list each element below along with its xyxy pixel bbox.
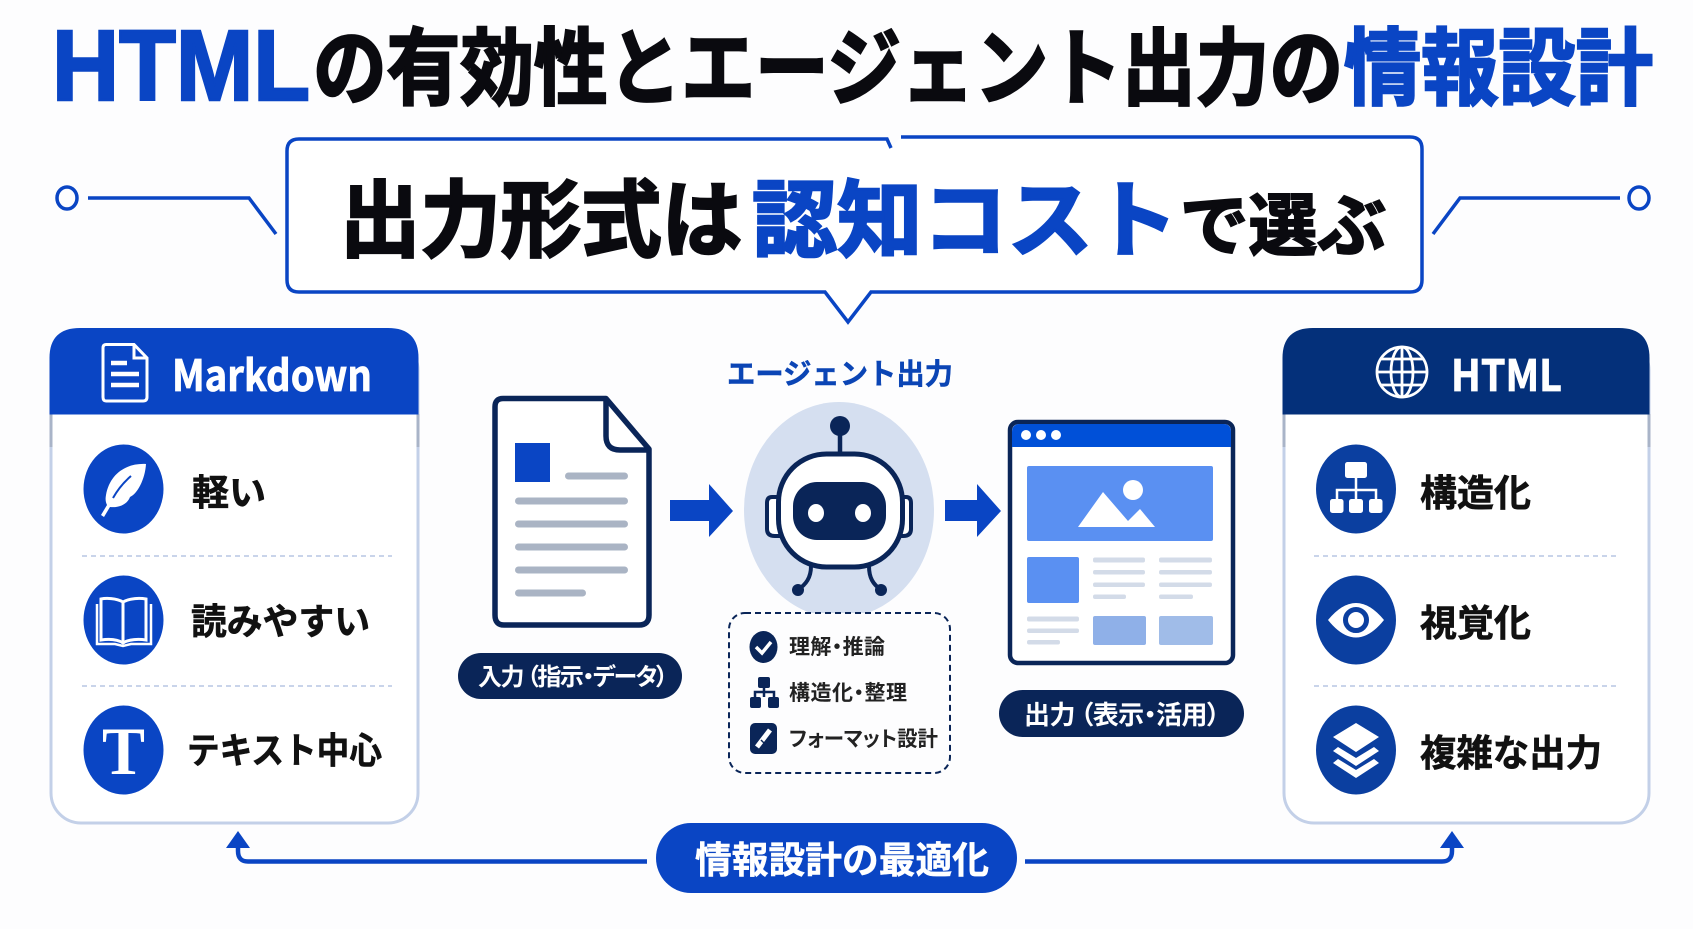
browser window icon	[1010, 422, 1233, 663]
item: 理解・推論	[750, 631, 885, 663]
callout: headline: 出力形式は	[340, 154, 741, 275]
feedback arrow: left	[226, 831, 647, 862]
item: 複雑な出力	[1316, 706, 1602, 794]
callout: headline	[287, 137, 1422, 322]
HTML header	[1282, 328, 1650, 414]
label: input: 入力 （指示・データ）	[478, 657, 668, 692]
callout: headline: で選ぶ	[1180, 171, 1386, 270]
label: output	[999, 690, 1244, 737]
callout: headline: 認知コスト	[752, 154, 1178, 275]
heading: agent output: エージェント出力	[727, 351, 953, 393]
item: 軽い: 軽い	[192, 464, 266, 516]
divider	[82, 556, 392, 686]
item: 軽い	[84, 444, 266, 534]
label: output: 出力 （表示・活用）	[1024, 695, 1220, 732]
item: 読みやすい	[84, 576, 370, 664]
title: の有効性とエージェント出力の	[313, 2, 1343, 123]
agent process box	[729, 613, 950, 773]
arrow: agent to output	[945, 484, 1001, 537]
feedback arrow: right	[1025, 831, 1464, 862]
Markdown header	[50, 328, 418, 414]
item: 視覚化: 視覚化	[1420, 593, 1531, 647]
robot icon	[744, 402, 934, 618]
item: 構造化	[1316, 444, 1531, 534]
item: 視覚化	[1316, 576, 1531, 664]
item: 構造化: 構造化	[1420, 463, 1531, 517]
input document icon	[495, 398, 649, 625]
label: input	[458, 653, 682, 699]
divider	[1314, 556, 1616, 686]
item: フォーマット設計: フォーマット設計	[789, 723, 938, 753]
title: 情報設計	[1344, 2, 1653, 123]
item: テキスト中心: テキスト中心	[187, 722, 382, 774]
title: HTML	[52, 10, 310, 122]
item: 複雑な出力: 複雑な出力	[1420, 723, 1602, 777]
left connector ornament	[57, 187, 276, 234]
Markdown header: Markdown	[172, 342, 372, 404]
item: 構造化・整理: 構造化・整理	[789, 677, 907, 707]
panel: Markdown	[50, 328, 418, 823]
right connector ornament	[1433, 187, 1649, 234]
item: テキスト中心: T	[102, 713, 145, 789]
item: 読みやすい: 読みやすい	[191, 593, 370, 645]
panel: HTML	[1282, 328, 1650, 823]
arrow: input to agent	[670, 484, 733, 537]
item: テキスト中心	[84, 706, 382, 794]
HTML header: HTML	[1451, 342, 1562, 404]
item: 理解・推論: 理解・推論	[789, 631, 885, 661]
pill: information design optimization: 情報設計の最適化	[695, 830, 989, 884]
pill: information design optimization	[656, 823, 1017, 893]
